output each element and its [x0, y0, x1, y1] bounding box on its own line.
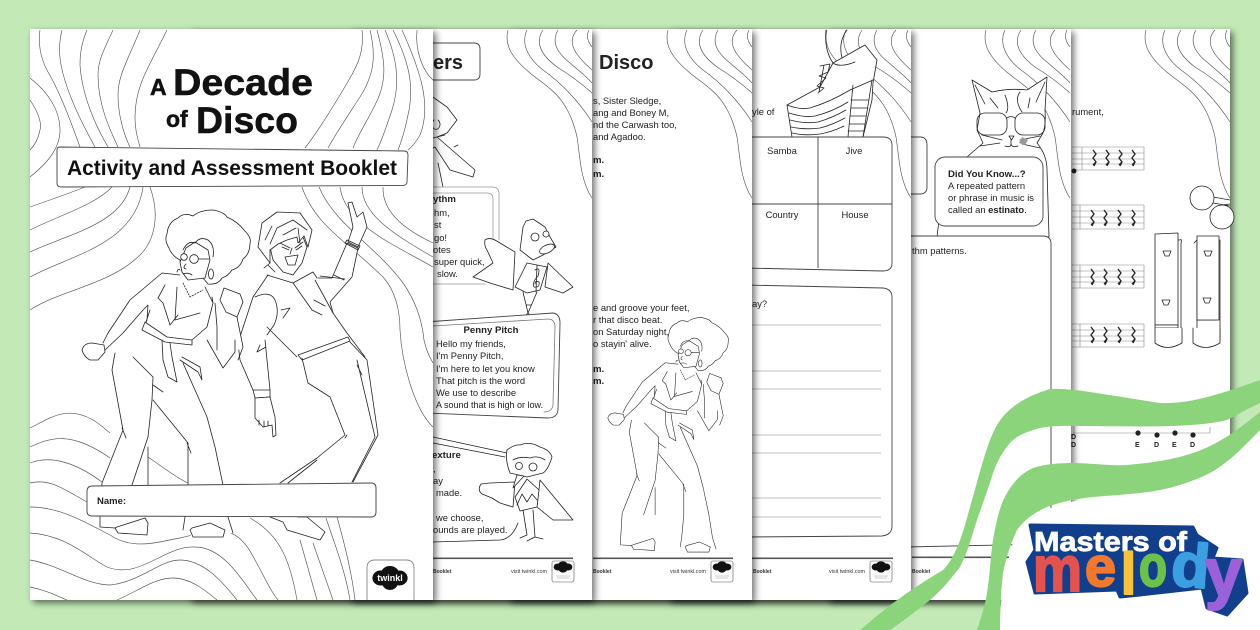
title: a decade of disco: of: [166, 106, 188, 132]
verse 1 lyrics: [593, 95, 677, 180]
footer: page 4: Booklet: [753, 569, 772, 575]
verse 1 lyrics: and Agadoo.: [593, 131, 646, 142]
page 3: disco song page: [349, 29, 752, 600]
grid: music styles: [745, 137, 892, 271]
callout: did you know: [935, 157, 1043, 226]
man: head: [270, 230, 307, 275]
notes with letter names: D: [1154, 442, 1159, 449]
grid: music styles: Jive: [846, 145, 862, 156]
banner: activity and assessment booklet: [57, 147, 408, 187]
woman: face: [180, 242, 210, 280]
footer: page 3: visit twinkl.com: [670, 569, 706, 575]
woman: forearm: [207, 303, 243, 368]
box: texture verse: made.: [436, 487, 462, 498]
name box: Name:: [97, 496, 126, 507]
man: raised arm and hand: [318, 243, 358, 313]
box: rhythm verse: hm,: [434, 207, 450, 218]
rhythm answer box: thm patterns.: [912, 245, 967, 256]
verse 1 lyrics: nd the Carwash too,: [593, 119, 677, 130]
illustration: bird with hat: [479, 443, 573, 541]
notes with letter names: [1071, 420, 1210, 449]
box: penny pitch verse: I'm Penny Pitch,: [436, 350, 503, 361]
title: a decade of disco: Disco: [196, 100, 298, 141]
name box: [87, 483, 376, 517]
callout: did you know: or phrase in music is: [948, 192, 1034, 203]
notes with letter names: D: [1071, 434, 1076, 441]
heading box fragment: [425, 43, 480, 80]
icon: tone bars: [1155, 233, 1220, 348]
callout: did you know: called an estinato.: [948, 204, 1027, 215]
box: texture verse: exture: [432, 450, 461, 461]
logo: masters of melody: Masters of: [1034, 526, 1188, 557]
box: penny pitch verse: [425, 313, 560, 418]
green ribbon: lower: [977, 412, 1260, 630]
contour lines: page 6: [1145, 30, 1230, 198]
text: instruction fragment: rument,: [1072, 106, 1104, 117]
illustration: cat with sunglasses: [937, 77, 1049, 237]
grid: music styles: Country: [766, 209, 799, 220]
box: rhythm verse: super quick,: [434, 256, 485, 267]
box: rhythm verse: go!: [434, 232, 447, 243]
small box on left: [905, 137, 927, 194]
box: penny pitch verse: That pitch is the word: [436, 375, 525, 386]
twinkl logo badge: [367, 560, 414, 600]
title: a decade of disco: [150, 62, 313, 141]
contour lines: page 4: [826, 30, 911, 198]
verse 2 lyrics: o stayin' alive.: [593, 338, 652, 349]
box: rhythm verse: st: [434, 219, 442, 230]
banner: activity and assessment booklet: Activity and Assessment Booklet: [67, 157, 397, 180]
box: penny pitch verse: We use to describe: [436, 387, 516, 398]
footer: page 4: [752, 558, 893, 582]
box: rhythm verse: ythm: [433, 194, 456, 205]
page 2: characters page: [189, 29, 592, 600]
woman: shoes: [115, 518, 148, 535]
man: torso and arm: [238, 275, 365, 390]
footer: page 2: visit twinkl.com: [511, 569, 547, 575]
illustration: bird one: [430, 95, 475, 187]
music staves with rests: [1072, 147, 1144, 347]
box: penny pitch verse: Hello my friends,: [436, 338, 506, 349]
verse 2 lyrics: m.: [593, 376, 604, 387]
page 5: did you know page: [668, 29, 1071, 600]
callout: did you know: A repeated pattern: [948, 180, 1025, 191]
grid: music styles: House: [841, 209, 869, 220]
illustration: platform shoe: [787, 30, 877, 137]
contour lines: cover: [30, 30, 433, 600]
logo: masters of melody: y: [1205, 535, 1242, 611]
notes with letter names: E: [1172, 442, 1177, 449]
box: penny pitch verse: Penny Pitch: [464, 325, 519, 336]
logo: masters of melody: [1027, 525, 1247, 615]
box: texture verse: ,: [433, 463, 436, 474]
verse 2 lyrics: e and groove your feet,: [593, 302, 689, 313]
icon: maracas: [1190, 186, 1234, 229]
text: question fragment: yle of: [752, 106, 775, 117]
verse 2 lyrics: [593, 302, 689, 387]
illustration: female disco dancer: [82, 210, 250, 537]
box: texture verse: we choose,: [435, 512, 483, 523]
writing box: [745, 285, 892, 537]
twinkl logo badge: twinkl: [377, 573, 403, 583]
logo: masters of melody: l: [1121, 542, 1136, 607]
white corner panel: [1000, 430, 1260, 630]
rhythm answer box: [905, 236, 1051, 547]
notes with letter names: D: [1190, 442, 1195, 449]
footer: page 2: [433, 558, 574, 582]
verse 1 lyrics: ang and Boney M,: [593, 107, 669, 118]
man: trousers: [270, 342, 378, 540]
title: a decade of disco: Decade: [173, 62, 313, 103]
verse 1 lyrics: m.: [593, 169, 604, 180]
box: penny pitch verse: A sound that is high or low.: [436, 399, 543, 410]
verse 1 lyrics: s, Sister Sledge,: [593, 95, 661, 106]
box: rhythm verse: slow.: [437, 268, 458, 279]
verse 2 lyrics: r that disco beat.: [593, 314, 662, 325]
woman: hair: [166, 210, 250, 284]
grid: music styles: Samba: [767, 145, 798, 156]
notes with letter names: D: [1071, 442, 1076, 449]
illustration: bird with treble clef: [473, 219, 573, 317]
writing box: ay?: [752, 298, 767, 309]
footer: page 2: Booklet: [433, 569, 452, 575]
footer: page 5: [912, 556, 1012, 575]
callout: did you know: Did You Know...?: [948, 169, 1026, 180]
page 6: instrument page: [827, 29, 1234, 600]
notes with letter names: E: [1135, 442, 1140, 449]
logo: masters of melody: o: [1139, 534, 1167, 599]
verse 2 lyrics: m.: [593, 364, 604, 375]
logo: masters of melody: m: [1033, 533, 1082, 605]
box: rhythm verse: otes: [433, 244, 451, 255]
heading box fragment: ers: [433, 52, 463, 74]
man: cuff and pointing hand: [253, 390, 270, 398]
verse 2 lyrics: on Saturday night,: [593, 326, 669, 337]
contour lines: page 5: [985, 30, 1070, 198]
box: penny pitch verse: I'm here to let you know: [436, 363, 535, 374]
logo: masters of melody: e: [1085, 535, 1116, 598]
box: rhythm verse: [433, 187, 499, 284]
woman: belt and sash: [142, 322, 192, 345]
footer: page 3: Booklet: [593, 569, 612, 575]
green ribbon: upper: [860, 380, 1260, 630]
illustration: disco dancer: [608, 318, 729, 552]
page 4: shoe and styles page: [508, 29, 911, 600]
footer: page 3: [593, 558, 733, 582]
footer: page 5: Booklet: [912, 569, 931, 575]
box: texture verse: [432, 437, 518, 542]
title: a decade of disco: A: [150, 74, 167, 100]
woman: upper body: [103, 273, 213, 350]
footer: page 4: visit twinkl.com: [829, 569, 865, 575]
illustration: male disco dancer: [238, 202, 378, 540]
contour lines: page 2: [507, 30, 592, 198]
contour lines: page 3: [667, 30, 752, 198]
woman: fists: [220, 288, 243, 317]
box: texture verse: ay: [433, 475, 443, 486]
woman: trousers: [100, 353, 233, 533]
front cover page: [30, 29, 433, 600]
verse 1 lyrics: m.: [593, 155, 604, 166]
box: texture verse: ounds are played.: [433, 524, 508, 535]
logo: masters of melody: d: [1169, 530, 1213, 602]
heading fragment: Disco: [599, 52, 653, 74]
